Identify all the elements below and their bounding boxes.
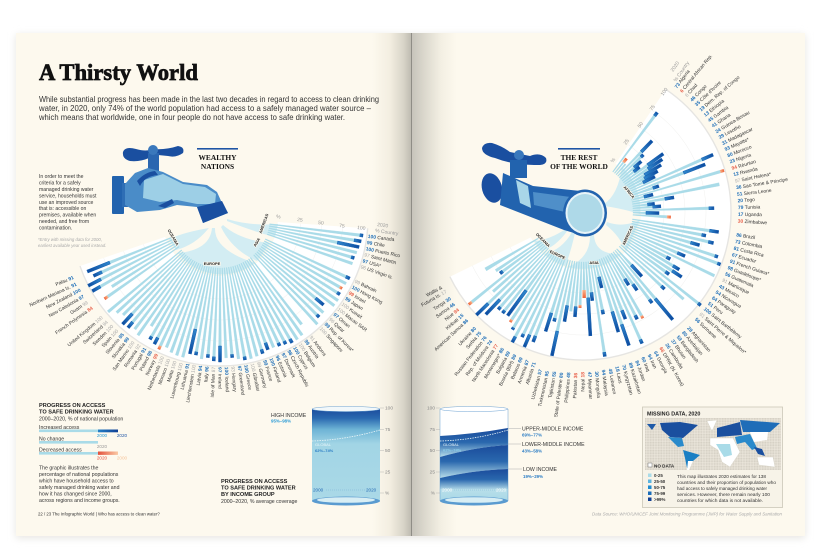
country labels: right half: 59 Bangladesh: [675, 335, 700, 364]
country labels: left half: Netherlands 100: [147, 355, 166, 391]
country labels: left half: Bosnia (BiH) 89: [498, 353, 518, 387]
country labels: right half: 67 Ecuador: [731, 252, 757, 265]
footnote: earliest available year used instead.: [38, 243, 106, 248]
label: lower-middle income: 43%–58%: [522, 448, 542, 454]
legend explanation text: percentage of national populations: [39, 472, 119, 478]
country labels: right half: 100 Macao SAR: [336, 307, 368, 334]
country labels: left half: Norway 99: [145, 353, 160, 377]
chart: left water glass: GLOBAL: [315, 442, 332, 447]
axis scale labels: 2020: [377, 222, 389, 230]
side note: criteria text: criteria for a safely: [39, 180, 81, 186]
legend: progress on access: PROGRESS ON ACCESS: [39, 403, 106, 409]
country labels: right half: 99 Japan: [344, 296, 364, 312]
intro text block: [38, 94, 379, 122]
country labels: right half: 46 Congo: [689, 84, 708, 103]
country labels: right half: 41 Ghana: [711, 112, 732, 129]
region labels: [167, 213, 270, 266]
region labels: EUROPE: [549, 249, 567, 261]
country labels: right half: 94 Iran: [646, 353, 658, 370]
region labels: AFRICA: [623, 185, 636, 199]
axis: left glass scale: [380, 406, 393, 496]
country labels: right half: 51 Sierra Leone: [737, 188, 772, 198]
country labels: left half: Poland 98: [139, 350, 154, 372]
country labels: right half: 26 Cambodia: [663, 342, 684, 371]
country labels: right half: 18 Laos: [613, 366, 623, 385]
ring background: [62, 60, 378, 376]
chart: left water glass: [312, 406, 380, 506]
country labels: right half: 45 Gambia: [707, 105, 730, 124]
country labels: right half: 66 DPRK (N. Korea): [658, 346, 685, 388]
side note: criteria text: needed, and free from: [39, 219, 89, 225]
country labels: right half: 100 Kuwait: [340, 302, 364, 321]
country labels: right half: 36 Sao Tome & Principe: [736, 177, 789, 191]
dark bars: increased access: [475, 112, 721, 357]
country labels: left half: Philippines 48: [564, 372, 572, 403]
country labels: right half: 96 US Virgin Is.: [360, 264, 394, 281]
axis: right glass scale: 100: [427, 406, 435, 412]
country labels: left half: San Marino 100: [112, 340, 137, 372]
country labels: left half: Nepal 18: [580, 372, 586, 392]
label: lower-middle income: [508, 442, 585, 454]
country labels: right half: 91 French Guiana*: [729, 259, 770, 277]
country labels: right half: 56 Suriname: [693, 317, 718, 340]
country labels: right half: 64 Georgia: [652, 350, 669, 375]
country labels: right half: 100 Iceland: [223, 367, 230, 393]
country labels: left half: French Polynesia 84: [54, 305, 95, 336]
country labels: right half: [216, 234, 401, 396]
label: upper-middle income: 69%–77%: [522, 432, 542, 438]
region labels: OCEANIA: [535, 232, 551, 248]
legend explanation text: safely managed drinking water and: [39, 485, 120, 491]
country labels: right half: 100 Puerto Rico: [365, 246, 401, 259]
country labels: right half: 31 Madagascar: [721, 126, 754, 147]
label: low income: LOW INCOME: [523, 467, 558, 473]
region labels: OCEANIA: [167, 228, 180, 246]
country labels: left half: Tonga 30: [432, 296, 453, 312]
map explanation text: services. However, there remain nearly 100: [677, 492, 771, 497]
country labels: right half: [586, 53, 789, 400]
country labels: right half: 99 Israel: [347, 291, 366, 305]
country labels: left half: Pakistan 36: [572, 372, 579, 399]
country labels: right half: 94 Réunion: [731, 159, 757, 172]
country labels: right half: 51 Peru: [706, 301, 724, 316]
country labels: right half: 100 Cyprus: [291, 346, 309, 371]
chart: rest of the world radial bars: [378, 7, 789, 418]
dark bars: increased access: [87, 234, 363, 362]
country labels: right half: 97 Greenland: [236, 365, 246, 396]
country labels: right half: 80 Azerbaijan: [680, 330, 704, 357]
country labels: right half: 99 Bahrain: [353, 279, 378, 294]
map explanation text: had access to safely managed drinking water: [677, 486, 767, 491]
country labels: right half: 73 Algeria: [674, 69, 692, 90]
footnote: *Entry with missing data for 2000,: [38, 237, 102, 242]
country labels: right half: 98 Czech Republic: [286, 349, 310, 389]
country labels: right half: 43 Mexico: [718, 284, 740, 300]
country labels: right half: 19 Dem. Rep. of Congo: [698, 75, 741, 113]
country labels: right half: 100 Singapore: [318, 326, 344, 354]
country labels: left half: Belarus 69: [510, 356, 525, 380]
country labels: left half: Portugal 91: [130, 347, 148, 371]
map legend: coverage swatches: 0-25: [654, 473, 663, 478]
country labels: right half: 94 Malaysia: [600, 369, 609, 396]
country labels: right half: 13 Ethiopia: [703, 98, 726, 118]
country labels: right half: 47 Myanmar: [586, 372, 593, 400]
country labels: left half: Northern Mariana Is. 91: [29, 282, 78, 309]
axis: left glass scale: 100: [385, 406, 393, 412]
legend explanation text: across regions and income groups.: [39, 498, 120, 504]
country labels: right half: 97 Saint Helena*: [734, 172, 772, 185]
country labels: right half: 100 Saint Barthélemy: [702, 306, 743, 341]
label: upper-middle income: UPPER-MIDDLE INCOME: [522, 426, 584, 432]
country labels: right half: 91 Andorra: [308, 335, 327, 358]
chart: left water glass: 2020: [366, 488, 377, 492]
label: low income: [508, 467, 558, 479]
country labels: right half: 99 France: [261, 359, 274, 382]
region labels: ASIA: [252, 237, 261, 248]
heading: progress by income group: 2000–2020, % average coverage: [221, 499, 298, 505]
orange bars: decreased access: [104, 286, 343, 350]
country labels: right half: 93 Mayotte*: [724, 137, 750, 153]
intro text block: water, in 2020, only 74% of the world population had access to a safely managed water source –: [38, 103, 371, 113]
map explanation text: [677, 474, 777, 503]
country labels: left half: Niue 94: [444, 307, 461, 323]
country labels: right half: 6 Central African Rep.: [679, 53, 714, 94]
map explanation text: countries and their proportion of population who: [677, 480, 777, 485]
country labels: left half: Bulgaria 89: [495, 350, 512, 375]
country labels: left half: Malta 100: [166, 360, 179, 383]
country labels: right half: 99 Germany: [255, 361, 268, 389]
world map: [645, 418, 781, 470]
legend explanation text: which have household access to: [39, 478, 114, 484]
country labels: right half: 29 Lesotho: [718, 124, 742, 141]
legend: progress on access: 2000: [117, 456, 128, 460]
heading: the rest of the world: [550, 148, 608, 171]
country labels: right half: 81 Costa Rica: [733, 246, 764, 259]
country labels: right half: 24 Guinea-Bissau: [715, 110, 751, 135]
country labels: right half: 97 USA*: [362, 258, 382, 270]
country labels: right half: 100 Belgium: [297, 342, 317, 369]
axis: right glass scale: 25: [430, 470, 435, 476]
legend: progress on access: 2020: [97, 456, 108, 460]
axis: right glass scale: 75: [430, 427, 435, 433]
country labels: right half: 99 Chile: [366, 240, 385, 249]
axis: right glass scale: [427, 406, 440, 496]
heading: progress by income group: BY INCOME GROUP: [221, 492, 275, 498]
region labels: ASIA: [589, 260, 599, 265]
title: A Thirsty World: [39, 60, 198, 86]
chart: wealthy nations radial bars: [29, 60, 401, 403]
orange bars: decreased access: [468, 158, 724, 323]
side note: criteria text: [39, 174, 97, 231]
heading: progress by income group: TO SAFE DRINKING WATER: [221, 486, 296, 492]
country labels: right half: 64 Paraguay: [710, 295, 737, 316]
axis scale labels: 75: [339, 223, 345, 230]
country labels: left half: Turkmenistan 95: [537, 370, 551, 407]
map legend: coverage swatches: 50-75: [654, 485, 666, 490]
axis scale labels: [610, 60, 691, 164]
country labels: left half: United Kingdom 100: [67, 315, 105, 348]
country labels: right half: 17 Uganda: [738, 212, 762, 218]
heading: progress by income group: PROGRESS ON ACCESS: [221, 479, 288, 485]
axis scale labels: [276, 214, 399, 237]
panel: missing data map: MISSING DATA, 2020: [647, 412, 700, 418]
country labels: right half: 84 Jordan: [633, 360, 646, 383]
heading: the rest of the world: THE REST: [561, 153, 597, 162]
light bars: [100, 223, 360, 359]
map explanation text: This map illustrates 2020 estimates for 138: [677, 474, 767, 479]
country labels: right half: 48 Lebanon: [607, 368, 617, 395]
country labels: left half: Slovenia 95: [105, 332, 126, 356]
country labels: left half: Luxembourg 100: [169, 362, 185, 399]
legend: progress on access: Increased access: [39, 425, 80, 431]
axis scale labels: 25: [297, 217, 303, 224]
country labels: right half: 73 Colombia: [735, 239, 763, 250]
country labels: right half: 23 Nigeria: [729, 152, 752, 165]
axis scale labels: 100: [660, 87, 670, 97]
legend: progress on access: Decreased access: [39, 448, 82, 454]
map legend: coverage swatches: 75-99: [654, 491, 666, 496]
axis scale labels: 75: [649, 104, 657, 112]
country labels: left half: [29, 275, 217, 403]
axis: left glass scale: 25: [385, 470, 391, 476]
country labels: left half: Palau 91: [55, 275, 75, 288]
country labels: left half: Isle of Man 87: [210, 366, 217, 398]
country labels: right half: 99 Rep. of Korea*: [323, 322, 355, 354]
heading: wealthy nations: NATIONS: [201, 162, 234, 171]
region labels: EUROPE: [204, 261, 221, 266]
country labels: right half: 30 Mongolia: [593, 371, 601, 399]
country labels: right half: 28 Afghanistan: [685, 326, 712, 354]
fan lines from tap to regions: [534, 167, 640, 269]
axis: right glass scale: 50: [430, 448, 435, 454]
chart: right water glass by income group: 2000: [442, 488, 453, 492]
region labels: [535, 185, 636, 265]
country labels: left half: Liechtenstein 100: [185, 364, 198, 403]
side note: criteria text: contamination.: [39, 225, 72, 231]
country labels: right half: 93 Hungary: [229, 366, 238, 393]
axis scale labels: 50: [637, 121, 645, 129]
light bars: [471, 115, 721, 353]
country labels: right half: 20 Togo: [737, 197, 755, 204]
country labels: left half: Rep. of Moldova 74: [465, 339, 494, 377]
fan lines from tap to regions: [169, 219, 278, 274]
country labels: left half: Armenia 87: [517, 359, 531, 385]
label: high income: HIGH INCOME: [271, 413, 307, 419]
country labels: right half: 86 Brazil: [736, 232, 756, 241]
intro text block: While substantial progress has been made in the last two decades in regard to access to clean drinking: [39, 94, 379, 104]
country labels: left half: Lithuania 91: [180, 363, 191, 390]
country labels: right half: 12 Rwanda: [733, 166, 759, 178]
legend: progress on access: No change: [39, 436, 64, 442]
side note: criteria text: use an improved source: [39, 200, 94, 206]
panel: missing data map: [642, 407, 782, 508]
chart: right water glass by income group: [440, 406, 508, 506]
label: upper-middle income: [508, 426, 584, 438]
chart: right water glass by income group: 2020: [496, 488, 507, 492]
side note: criteria text: service, households must: [39, 193, 97, 199]
map explanation text: countries for which data is not available.: [677, 498, 763, 503]
legend explanation text: The graphic illustrates the: [39, 466, 99, 472]
side note: criteria text: In order to meet the: [39, 174, 84, 180]
country labels: left half: Ukraine 80: [457, 326, 478, 347]
axis: left glass scale: 50: [385, 448, 391, 454]
country labels: right half: 98 Guadeloupe*: [726, 265, 762, 283]
label: low income: 19%–29%: [523, 474, 543, 479]
region labels: AMERICAS: [621, 225, 634, 246]
legend explanation text: how it has changed since 2000,: [39, 492, 112, 498]
axis scale labels: 100: [357, 225, 366, 232]
chart: left water glass: 62%–74%: [315, 448, 334, 453]
country labels: right half: 97 Saint Martin: [364, 252, 397, 266]
country labels: right half: 97 Oman: [332, 312, 351, 330]
icon: rest of the world water tap: [478, 143, 607, 236]
map legend: no data: NO DATA: [654, 464, 675, 468]
country labels: left half: Albania 71: [525, 361, 538, 385]
country labels: left half: Wallis &: [425, 285, 444, 299]
country labels: left half: Russian Federation 76: [454, 335, 489, 378]
country labels: left half: Uzbekistan 57: [530, 369, 544, 400]
country labels: right half: 91 Saint Pierre & Miquelon*: [698, 312, 747, 356]
country labels: left half: New Zealand 100: [45, 288, 82, 311]
axis scale labels: % Country: [375, 228, 399, 237]
country labels: right half: 97 Denmark: [280, 352, 297, 379]
country labels: left half: Switzerland 94: [82, 319, 110, 346]
chart: right water glass by income group: GLOBAL: [443, 442, 460, 447]
intro text block: which means that worldwide, one in four people do not have access to safe drinking water.: [38, 112, 345, 122]
label: high income: [271, 413, 307, 424]
side note: criteria text: premises, available when: [39, 213, 96, 219]
country labels: right half: 80 Morocco: [727, 144, 753, 159]
country labels: left half: American Samoa 86: [433, 318, 470, 353]
axis scale labels: 2020: [670, 60, 681, 73]
region labels: AMERICAS: [258, 213, 270, 234]
heading: wealthy nations: [197, 148, 238, 171]
country labels: right half: 100 Finland: [267, 357, 282, 384]
country labels: left half: Romania 92: [123, 343, 143, 369]
country labels: left half: Futuna Is. 17: [420, 289, 448, 308]
country labels: left half: Kiribati 15: [445, 313, 465, 332]
map legend: coverage swatches: >99%: [654, 497, 665, 502]
axis scale labels: 25: [623, 138, 631, 146]
label: high income: 95%–98%: [271, 418, 291, 424]
legend: progress on access: 2000: [97, 433, 108, 438]
map legend: coverage swatches: 25-50: [654, 479, 666, 484]
country labels: right half: 6 Chad: [684, 83, 699, 99]
country labels: left half: Serbia 75: [465, 330, 483, 350]
country labels: left half: New Caledonia 97: [48, 294, 86, 319]
country labels: left half: Guam 99: [69, 300, 90, 316]
country labels: left half: Slovakia 99: [111, 336, 131, 360]
country labels: right half: 100 Canada: [367, 234, 395, 243]
legend: progress on access: TO SAFE DRINKING WATER: [39, 410, 114, 416]
country labels: right half: 56 Guatemala: [724, 271, 755, 289]
chart: left water glass: 2000: [313, 488, 324, 492]
data source: Data Source: WHO/UNICEF Joint Monitoring Programme (JMP) for Water Supply and Sanitation: [592, 512, 783, 516]
country labels: left half: Tajikistan 55: [548, 371, 558, 399]
country labels: left half: Italy 96: [203, 366, 211, 382]
axis scale labels: %: [610, 157, 618, 164]
axis scale labels: % Country: [673, 60, 691, 83]
country labels: right half: 96 Qatar: [327, 317, 346, 335]
legend explanation text: [39, 466, 120, 504]
country labels: left half: Sweden 100: [92, 324, 115, 347]
country labels: right half: 35 Côte d'Ivoire: [694, 80, 723, 108]
country labels: right half: 37 Bhutan: [669, 339, 687, 361]
country labels: right half: 91 Martinique: [721, 278, 750, 296]
country labels: left half: [420, 285, 586, 418]
country labels: left half: North Macedonia 77: [471, 343, 500, 383]
country labels: right half: 79 Tunisia: [738, 204, 761, 211]
ring background: [378, 7, 788, 417]
footnote: [38, 237, 106, 248]
legend: progress on access: 2000–2020, % of national population: [39, 416, 123, 422]
axis scale labels: 50: [318, 220, 324, 227]
country labels: right half: 100 Greece: [242, 364, 253, 391]
axis scale labels: %: [276, 214, 281, 221]
country labels: right half: 30 Zimbabwe: [738, 219, 767, 226]
legend: progress on access: 2020: [117, 433, 128, 438]
country labels: right half: 96 Estonia: [274, 355, 288, 379]
country labels: right half: 100 Gibraltar: [249, 363, 261, 392]
axis: left glass scale: %: [385, 490, 390, 496]
legend: progress on access: 2020: [97, 444, 108, 449]
heading: wealthy nations: WEALTHY: [199, 153, 237, 162]
country labels: left half: Spain 100: [101, 328, 120, 349]
country labels: right half: 89 Kazakhstan: [627, 362, 642, 395]
country labels: right half: 99 Austria: [302, 339, 320, 360]
side note: criteria text: managed drinking water: [39, 187, 94, 193]
country labels: right half: 100 Hong Kong: [350, 285, 384, 306]
country labels: left half: Samoa 46: [435, 302, 457, 320]
country labels: left half: Monaco 100: [157, 358, 172, 386]
country labels: left half: Latvia 94: [196, 365, 204, 386]
map legend: coverage swatches: [648, 473, 666, 502]
country labels: right half: 70 Kyrgyzstan: [620, 364, 634, 396]
axis: right glass scale: %: [431, 490, 436, 496]
country labels: right half: 97 Ireland: [216, 367, 222, 389]
country labels: right half: 60 Iraq: [639, 356, 651, 373]
icon: wealthy nations water tap: [112, 145, 228, 223]
axis: left glass scale: 75: [385, 427, 391, 433]
label: lower-middle income: LOWER-MIDDLE INCOME: [522, 442, 585, 448]
heading: the rest of the world: OF THE WORLD: [550, 162, 608, 171]
country labels: left half: Montenegro* 86: [483, 347, 506, 380]
heading: progress by income group: [221, 479, 298, 505]
chart: right water glass by income group: 62%–74%: [443, 448, 462, 452]
side note: criteria text: that is: accessible on: [39, 206, 86, 212]
footer: page numbers: 22 / 23 The Infographic World | Who has access to clean water?: [38, 512, 160, 516]
legend: progress on access: [39, 403, 128, 460]
country labels: right half: 54 Nicaragua: [714, 290, 742, 310]
country labels: left half: State of Palestine 80: [553, 372, 565, 418]
